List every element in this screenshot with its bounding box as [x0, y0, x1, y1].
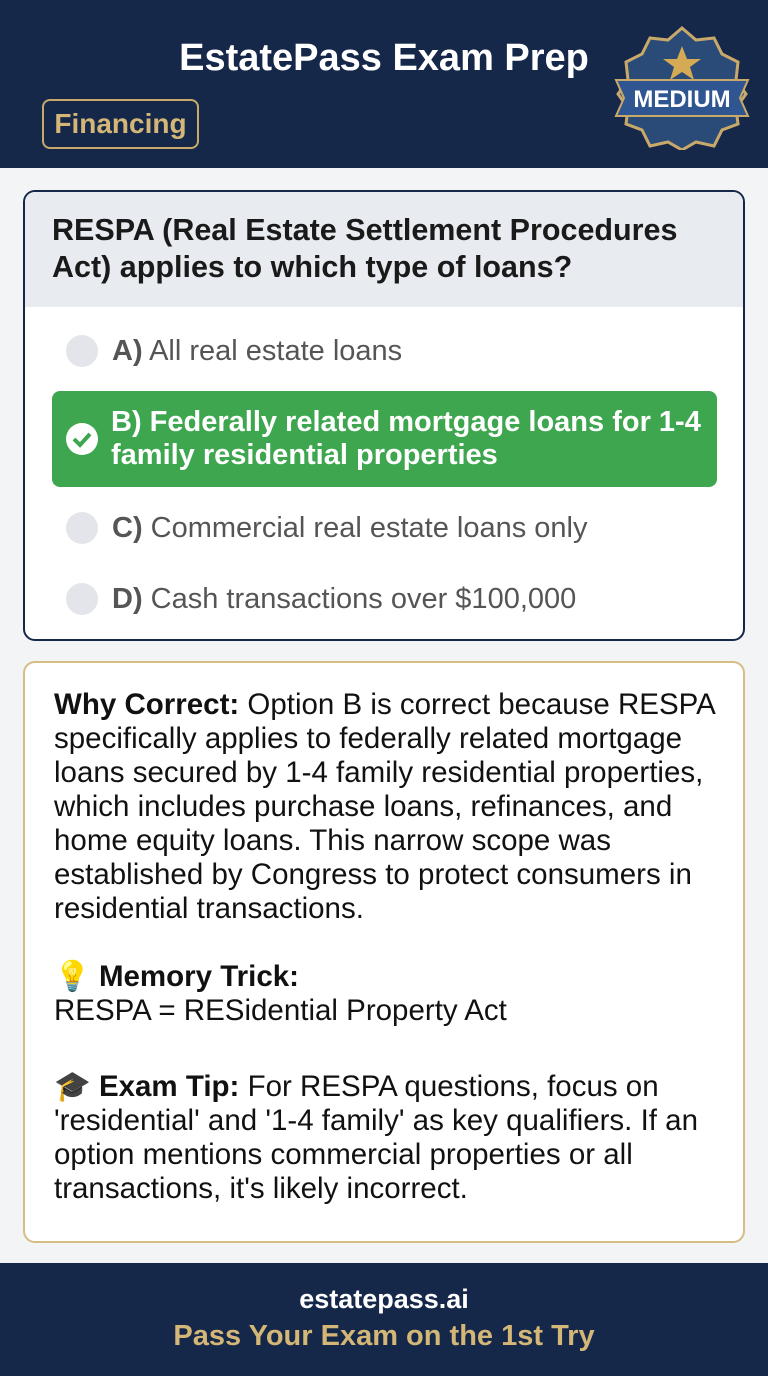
- tagline: Pass Your Exam on the 1st Try: [173, 1320, 595, 1352]
- option B correct: B) Federally related mortgage loans for 1-4 family residential properties: [111, 406, 701, 471]
- option B correct: [52, 391, 717, 487]
- question text: RESPA (Real Estate Settlement Procedures Act) applies to which type of loans?: [52, 213, 677, 284]
- exam tip: 🎓 Exam Tip: For RESPA questions, focus on 'residential' and '1-4 family' as key qualifiers. If an option mentions commercial properties or all transactions, it's likely incorrect.: [54, 1070, 698, 1205]
- badge: medium: MEDIUM: [633, 86, 731, 113]
- badge: medium: [614, 26, 750, 150]
- footer: [0, 1263, 768, 1376]
- footer url: estatepass.ai: [299, 1284, 469, 1314]
- memory trick: [54, 960, 507, 1027]
- explanation card: [23, 661, 745, 1243]
- memory trick: 💡 Memory Trick:: [54, 960, 299, 993]
- icon: check: [66, 423, 98, 455]
- option D: D) Cash transactions over $100,000: [112, 582, 576, 614]
- memory trick: RESPA = RESidential Property Act: [54, 994, 507, 1027]
- option A: A) All real estate loans: [112, 334, 402, 366]
- category tag: [42, 99, 199, 149]
- category tag: Financing: [54, 108, 187, 139]
- why correct: Why Correct: Option B is correct because RESPA specifically applies to federally related mortgage loans secured by 1-4 family residential properties, which includes purchase loans, refinances, and home equity loans. This narrow scope was established by Congress to protect consumers in residential transactions.: [54, 688, 714, 925]
- header: [0, 0, 768, 168]
- question card: [23, 190, 745, 641]
- question text: [25, 192, 745, 307]
- title: EstatePass Exam Prep: [179, 37, 589, 79]
- option C: C) Commercial real estate loans only: [112, 512, 587, 544]
